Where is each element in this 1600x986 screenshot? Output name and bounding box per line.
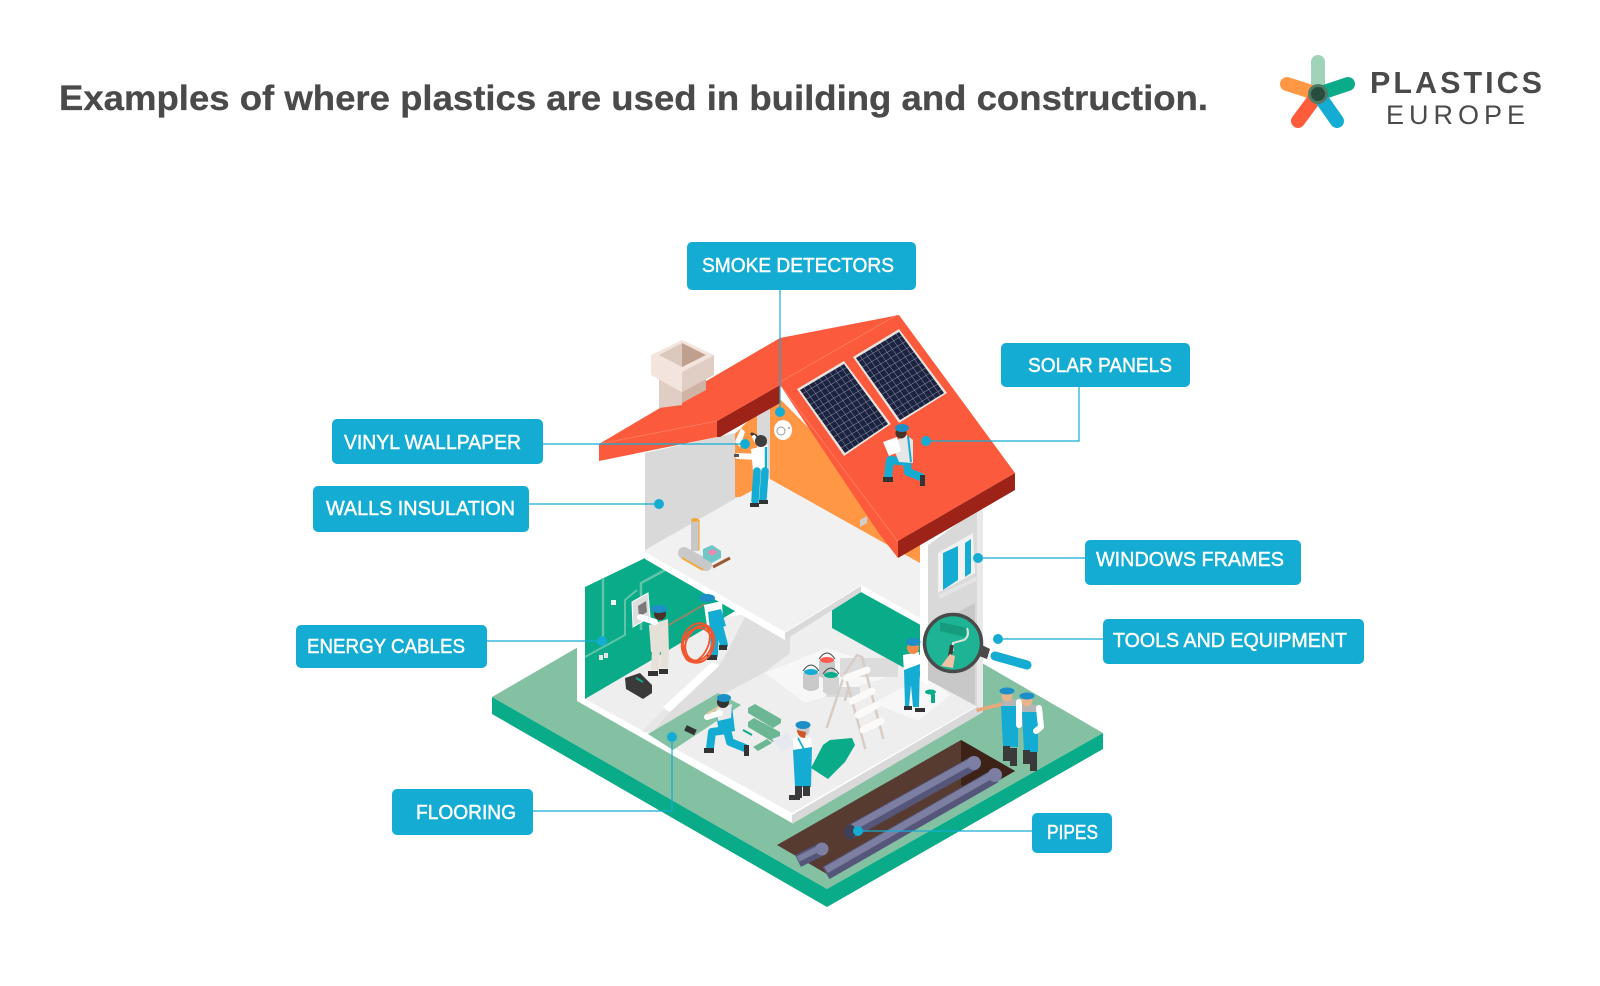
right column wall [920, 505, 983, 710]
label text: SMOKE DETECTORS [702, 254, 894, 277]
label box [1085, 540, 1301, 585]
callout: pipes [853, 813, 1112, 853]
upper floor slab [645, 479, 920, 640]
ground floor outer walls [577, 553, 983, 823]
marker dot [973, 553, 983, 563]
paint buckets [803, 653, 839, 695]
flooring panels [648, 693, 855, 779]
marker dot [853, 826, 863, 836]
label text: WALLS INSULATION [326, 497, 515, 520]
leader line [779, 290, 781, 412]
house illustration [492, 315, 1103, 907]
orange wallpaper on left wall [735, 412, 757, 497]
label box [296, 625, 487, 668]
foreman with plan [772, 721, 813, 800]
label box [332, 419, 543, 464]
teal wall with energy cables [585, 558, 737, 699]
marker dot [667, 732, 677, 742]
leader line [978, 557, 1085, 559]
floor paint patches [765, 648, 950, 721]
toolbox [625, 673, 652, 699]
electrician [640, 605, 669, 676]
label text: PIPES [1047, 821, 1098, 844]
leader line [487, 640, 602, 642]
label box [1032, 813, 1112, 853]
worker applying wallpaper [734, 428, 768, 507]
callout: vinyl wallpaper [332, 419, 750, 464]
worker with cable coil [677, 594, 727, 666]
logo star icon [1287, 62, 1348, 121]
paint can [925, 690, 936, 705]
orange wall under roof [770, 400, 920, 563]
leader line [926, 387, 1079, 441]
ground floor slab [585, 600, 980, 813]
label text: SOLAR PANELS [1028, 354, 1172, 377]
ladder [827, 655, 883, 748]
logo wordmark: EUROPE: EUROPE [1386, 100, 1525, 130]
callout: smoke detectors [687, 242, 916, 417]
label text: WINDOWS FRAMES [1096, 548, 1284, 571]
magnifier: tools and equipment [924, 614, 1027, 672]
callout: tools and equipment [993, 619, 1364, 664]
ground plate [492, 538, 1103, 907]
smoke detector [774, 420, 792, 440]
label text: ENERGY CABLES [307, 635, 465, 658]
label box [1001, 343, 1190, 387]
label text: VINYL WALLPAPER [344, 431, 521, 454]
label box [392, 789, 533, 835]
leader line [543, 443, 745, 445]
label text: FLOORING [416, 801, 516, 824]
right teal wall [832, 592, 926, 680]
worker on roof [883, 424, 925, 486]
callout: windows frames [973, 540, 1301, 585]
rolls and materials on upper floor [682, 518, 730, 570]
two supervisors [978, 688, 1041, 771]
leader line [529, 503, 659, 505]
marker dot [597, 636, 607, 646]
stairs shadow [642, 613, 790, 732]
callout: flooring [392, 732, 677, 835]
label box [687, 242, 916, 290]
marker dot [654, 499, 664, 509]
callout: energy cables [296, 625, 607, 668]
label text: TOOLS AND EQUIPMENT [1113, 629, 1347, 652]
title: Examples of where plastics are used in building and construction. [59, 79, 1208, 118]
label box [313, 486, 529, 532]
solar panels [797, 329, 947, 456]
label box [1103, 619, 1364, 664]
upper grey wall with insulation [645, 407, 770, 550]
logo wordmark: PLASTICS: PLASTICS [1370, 66, 1542, 100]
marker dot [993, 634, 1003, 644]
trench with pipes [777, 740, 1015, 877]
painter [903, 638, 930, 712]
leader line [533, 737, 672, 811]
marker dot [740, 439, 750, 449]
marker dot [921, 436, 931, 446]
roof [599, 315, 1015, 558]
window frames [938, 533, 978, 599]
vent [860, 516, 867, 527]
callout: solar panels [921, 343, 1190, 446]
ground floor side edge [792, 705, 983, 824]
chimney [651, 340, 714, 408]
leader line [998, 638, 1103, 640]
callout: walls insulation [313, 486, 664, 532]
marker dot [775, 407, 785, 417]
worker installing flooring [704, 694, 749, 756]
leader line [858, 830, 1032, 832]
logo: Plastics Europe [1287, 62, 1542, 130]
